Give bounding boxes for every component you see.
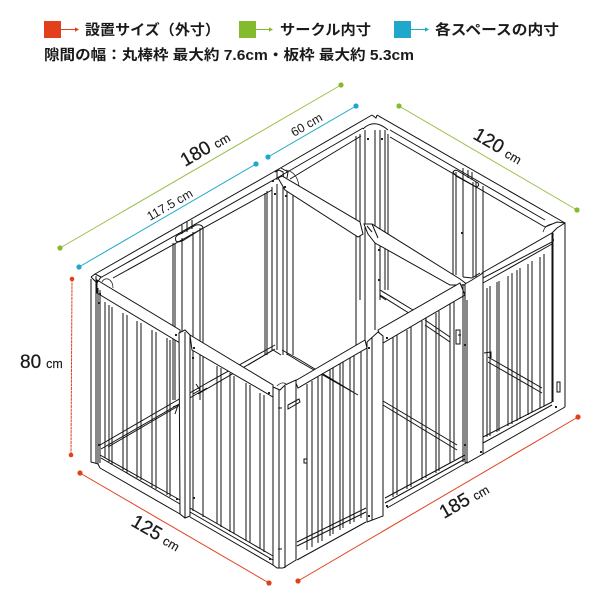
dimension: 180 cm [57,82,344,251]
dimension: 120 cm: 120cm [470,124,526,169]
middle panel [393,302,454,497]
back right panel post [453,172,483,277]
centre post [179,330,190,518]
middle back posts [265,184,293,355]
right door [487,254,544,437]
back panels and posts [95,115,565,400]
centre divider rail [278,176,468,285]
legend item: outer installation size [44,21,220,39]
pet circle line drawing [91,115,565,568]
dimension: 125 cm [77,470,272,586]
dimension: 120 cm [396,103,580,213]
dimension: 60 cm: 60 cm [288,110,325,140]
right centre post [465,273,483,463]
dimension: 185 cm: 185cm [436,478,493,523]
left door bars [307,352,361,550]
dimension: 180 cm: 180cm [177,126,234,171]
dimension: 125 cm: 125cm [128,511,184,556]
dimension: 117.5 cm: 117.5 cm [144,186,195,224]
right front panel [273,222,565,568]
legend item: outer installation size: 設置サイズ（外寸） [85,21,220,39]
legend item: circle inner size: サークル内寸 [280,22,371,39]
dimension: 60 cm [265,103,359,160]
top rail left section [97,280,180,343]
right post [545,222,565,407]
bars [105,302,170,497]
legend item: each space inner size [394,21,559,39]
top rail right section [190,335,273,397]
back corner posts [356,130,388,345]
bottom rail [100,455,273,565]
door latch [278,399,300,549]
dimension: 80 cm [20,277,74,457]
gap width note: 隙間の幅：丸棒枠 最大約 7.6cm・板枠 最大約 5.3cm [44,47,414,64]
back left panel post [173,228,203,400]
front left panel [91,274,273,565]
screw marks [98,138,557,560]
left door rail [295,340,367,388]
legend [44,21,559,39]
left post [91,279,100,464]
floor rails [100,288,542,450]
front corner post [273,380,296,568]
legend item: circle inner size [239,21,371,39]
dimension: 185 cm [295,414,581,584]
centre post [367,332,383,522]
legend item: each space inner size: 各スペースの内寸 [435,21,559,39]
dimension: 117.5 cm [76,161,259,270]
dimension: 80 cm: 80 cm [20,352,63,373]
